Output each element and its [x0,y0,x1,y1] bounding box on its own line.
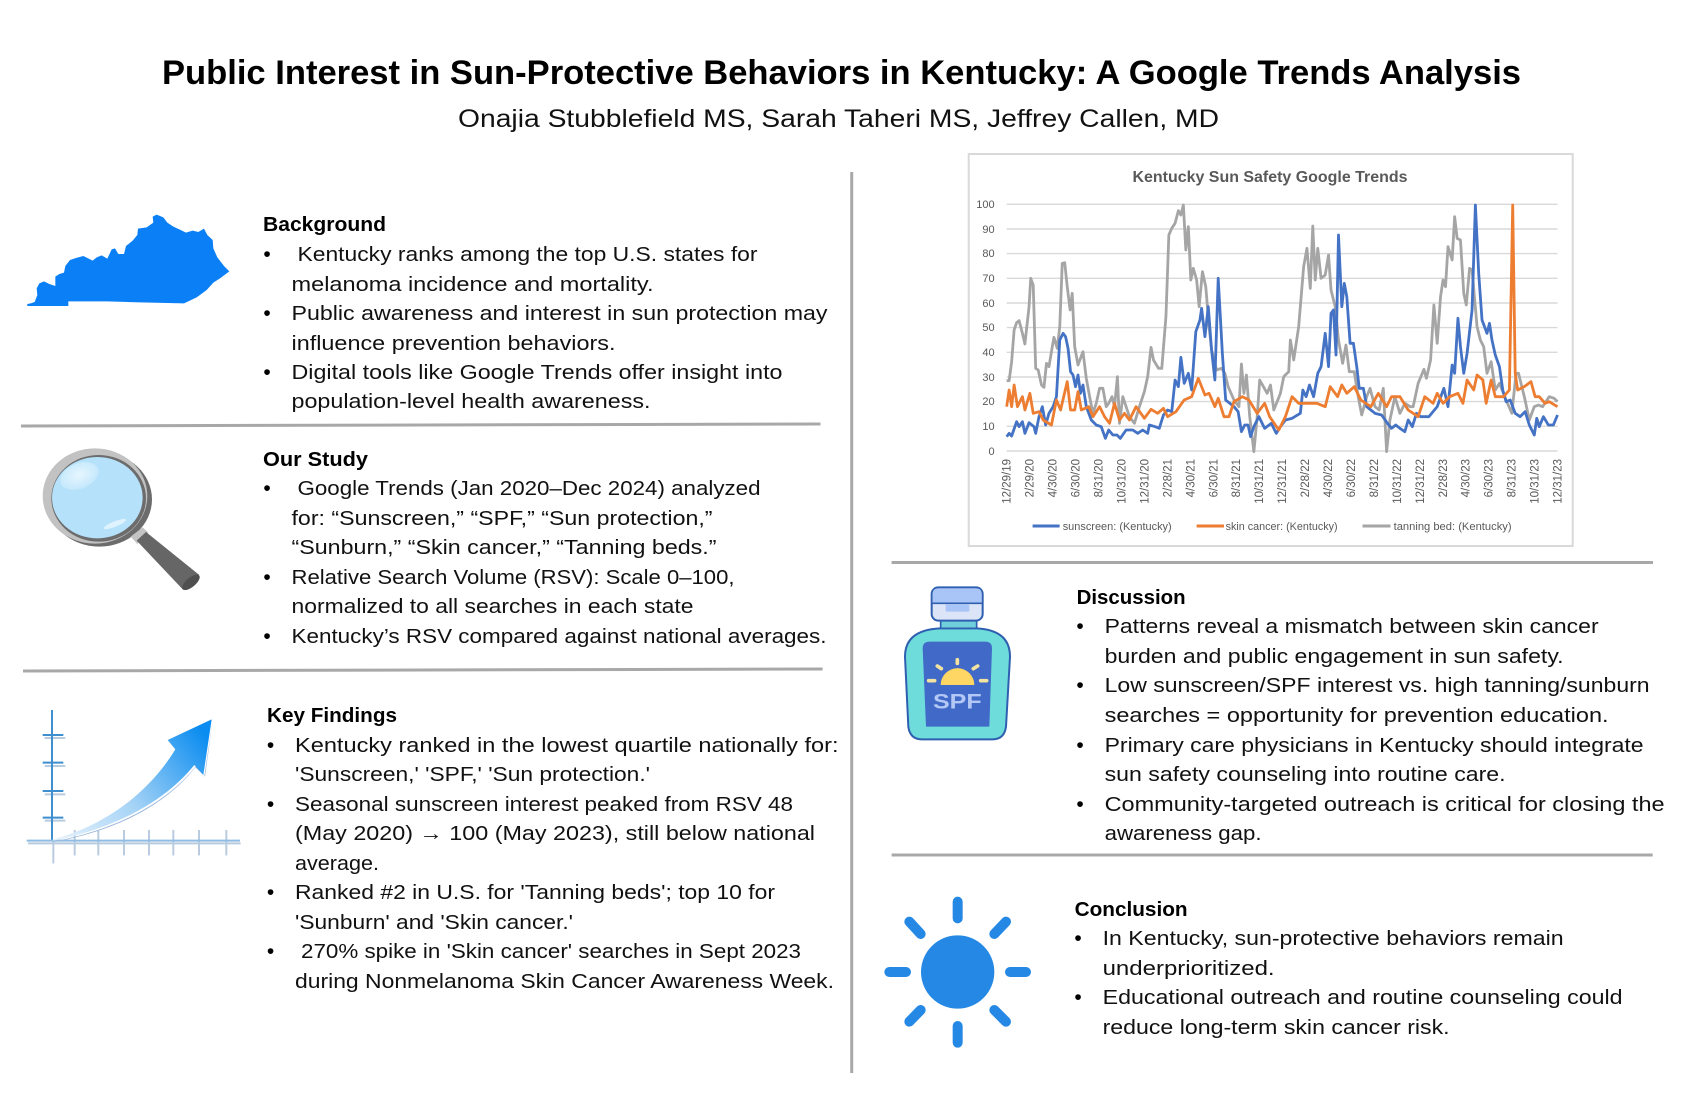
title: Public Interest in Sun-Protective Behaviors in Kentucky: A Google Trends Analysis [162,54,1521,92]
icon: Kentucky map [27,215,229,306]
x axis date labels: 10/31/21 [1254,459,1266,504]
bullet list: discussion: Community-targeted outreach is critical for closing the [1105,793,1665,816]
bullet list: discussion: • [1076,734,1084,757]
y axis: 30 [982,372,995,384]
bullet list: key findings: (May 2020) → 100 (May 2023), still below national [295,822,815,845]
heading: our study: Our Study [263,448,369,471]
bullet list: our study: normalized to all searches in each state [292,595,694,618]
bullet list: discussion: burden and public engagement in sun safety. [1105,645,1564,668]
panel: line chart [969,154,1573,546]
panel: key findings [27,704,839,993]
series: skin cancer [1007,205,1558,430]
bullet list: conclusion: reduce long-term skin cancer risk. [1103,1016,1450,1039]
x axis date labels: 12/31/23 [1552,459,1564,504]
bullet list: key findings: • [267,881,274,904]
legend [1033,521,1512,533]
bullet list: background: influence prevention behaviors. [292,332,616,355]
bullet list: our study: “Sunburn,” “Skin cancer,” “Tanning beds.” [292,536,717,559]
bullet list: our study: Kentucky’s RSV compared against national averages. [292,625,826,648]
bullet list: our study [263,477,826,648]
bullet list: discussion: Low sunscreen/SPF interest vs. high tanning/sunburn [1105,674,1650,697]
bullet list: conclusion: • [1074,986,1082,1009]
y axis: 90 [982,224,995,236]
x axis date labels: 10/31/23 [1530,459,1542,504]
bullet list: conclusion: • [1074,927,1082,950]
y axis: 0 [988,446,995,458]
x axis date labels: 12/31/20 [1139,459,1151,504]
bullet list: our study: • [263,566,271,589]
legend: tanning bed: (Kentucky) [1394,521,1512,533]
bullet list: key findings: Kentucky ranked in the lowest quartile nationally for: [295,734,838,757]
bullet list: conclusion: Educational outreach and routine counseling could [1103,986,1623,1009]
y axis: 70 [982,273,995,285]
bullet list: our study: • [263,625,271,648]
x axis date labels: 6/30/21 [1208,459,1220,497]
x axis date labels: 2/28/23 [1438,459,1450,497]
icon: magnifying glass [43,448,202,593]
y axis: 60 [982,298,995,310]
x axis date labels: 4/30/23 [1461,459,1473,497]
panel: discussion [905,586,1665,845]
icon: SPF sunscreen bottle [905,587,1010,739]
chart title: Kentucky Sun Safety Google Trends [1132,169,1408,186]
x axis date labels: 8/31/21 [1231,459,1243,497]
heading: discussion: Discussion [1077,586,1186,609]
bullet list: conclusion: In Kentucky, sun-protective behaviors remain [1103,927,1564,950]
panel: conclusion [889,898,1623,1043]
series: sunscreen [1007,205,1558,438]
y axis: 50 [982,322,995,334]
panel: our study [43,448,826,648]
y axis: 80 [982,248,995,260]
bullet list: discussion: sun safety counseling into routine care. [1105,763,1506,786]
bullet list: key findings: 270% spike in 'Skin cancer' searches in Sept 2023 [301,940,801,963]
data series [1007,205,1558,452]
x axis date labels: 4/30/21 [1185,459,1197,497]
x axis date labels [1002,459,1564,504]
y axis: 100 [976,199,995,211]
bullet list: key findings [267,734,838,993]
icon: rising arrow chart [27,710,241,863]
bullet list: discussion: searches = opportunity for prevention education. [1105,704,1609,727]
x axis date labels: 12/31/21 [1277,459,1289,504]
bullet list: background: • [263,361,271,384]
bullet list: key findings: during Nonmelanoma Skin Cancer Awareness Week. [295,970,834,993]
legend: skin cancer: (Kentucky) [1226,521,1338,533]
x axis date labels: 4/30/22 [1323,459,1335,497]
bullet list: key findings: 'Sunburn' and 'Skin cancer.' [295,911,573,934]
panel: background [27,213,828,413]
x axis date labels: 8/31/23 [1507,459,1519,497]
y axis: 40 [982,347,995,359]
bullet list: background: population-level health awareness. [292,390,650,413]
bullet list: background: • [263,243,271,266]
bullet list: conclusion [1074,927,1623,1039]
bullet list: key findings: • [267,793,274,816]
bullet list: background [263,243,828,413]
x axis date labels: 6/30/22 [1346,459,1358,497]
legend: sunscreen: (Kentucky) [1063,521,1172,533]
x axis date labels: 12/29/19 [1002,459,1014,504]
x axis date labels: 8/31/20 [1094,459,1106,497]
x axis date labels: 6/30/23 [1484,459,1496,497]
x axis date labels: 12/31/22 [1415,459,1427,504]
bullet list: discussion [1076,615,1665,845]
bullet list: our study: • [263,477,271,500]
x axis date labels: 10/31/22 [1392,459,1404,504]
bullet list: background: Public awareness and interest in sun protection may [292,302,828,325]
bullet list: discussion: • [1076,793,1084,816]
bullet list: discussion: Primary care physicians in Kentucky should integrate [1105,734,1644,757]
bullet list: background: Kentucky ranks among the top U.S. states for [298,243,758,266]
column divider [850,172,853,1073]
bullet list: discussion: awareness gap. [1105,822,1262,845]
bullet list: discussion: Patterns reveal a mismatch between skin cancer [1105,615,1599,638]
bullet list: our study: Google Trends (Jan 2020–Dec 2024) analyzed [298,477,760,500]
series: tanning bed [1007,205,1558,452]
x axis date labels: 8/31/22 [1369,459,1381,497]
bullet list: key findings: Ranked #2 in U.S. for 'Tanning beds'; top 10 for [295,881,775,904]
bullet list: key findings: average. [295,852,379,875]
y axis: 20 [982,396,995,408]
y axis: 10 [982,421,995,433]
bullet list: conclusion: underprioritized. [1103,957,1275,980]
x axis date labels: 2/28/22 [1300,459,1312,497]
heading: conclusion: Conclusion [1075,898,1188,921]
bullet list: background: melanoma incidence and mortality. [292,273,654,296]
x axis date labels: 10/31/20 [1116,459,1128,504]
bullet list: our study: for: “Sunscreen,” “SPF,” “Sun protection,” [292,507,713,530]
x axis date labels: 2/28/21 [1162,459,1174,497]
bullet list: background: Digital tools like Google Trends offer insight into [292,361,782,384]
heading: background: Background [263,213,386,236]
authors: Onajia Stubblefield MS, Sarah Taheri MS, Jeffrey Callen, MD [458,105,1219,133]
x axis date labels: 2/29/20 [1025,459,1037,497]
SPF label: SPF [933,689,982,713]
bullet list: discussion: • [1076,615,1084,638]
x axis date labels: 6/30/20 [1071,459,1083,497]
icon: sun [889,902,1026,1043]
bullet list: key findings: Seasonal sunscreen interest peaked from RSV 48 [295,793,793,816]
x axis date labels: 4/30/20 [1048,459,1060,497]
bullet list: key findings: • [267,734,274,757]
bullet list: our study: Relative Search Volume (RSV): Scale 0–100, [292,566,734,589]
bullet list: key findings: 'Sunscreen,' 'SPF,' 'Sun protection.' [295,763,650,786]
bullet list: discussion: • [1076,674,1084,697]
bullet list: background: • [263,302,271,325]
bullet list: key findings: • [267,940,274,963]
y axis [976,199,1558,458]
chart frame [969,154,1573,546]
heading: key findings: Key Findings [267,704,397,727]
